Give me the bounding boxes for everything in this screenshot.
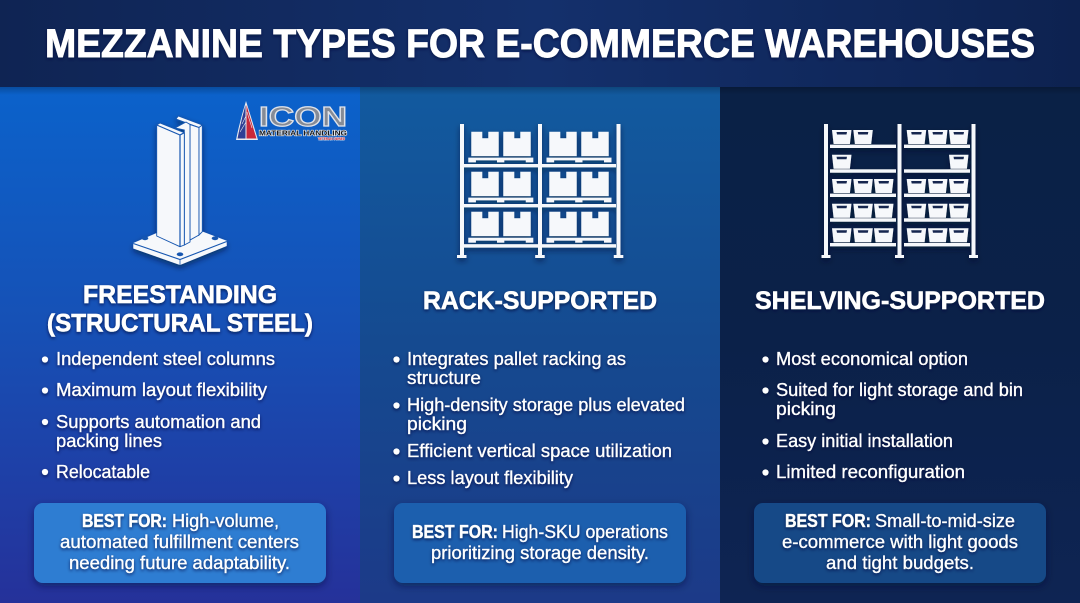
bullet list: freestanding: Maximum layout flexibility <box>56 379 268 400</box>
bullet list: rack-supported: picking <box>407 413 467 434</box>
logo: ICON Material Handling: VETERAN OWNED <box>318 136 345 141</box>
callout: best for rack-supported: High-SKU operations <box>502 521 668 542</box>
bullet list: shelving-supported: Easy initial installation <box>776 430 953 451</box>
callout: best for freestanding <box>34 503 326 583</box>
bullet list: shelving-supported: Suited for light storage and bin <box>776 379 1023 400</box>
heading: freestanding: (STRUCTURAL STEEL) <box>47 310 313 338</box>
bullet list: rack-supported: Efficient vertical space utilization <box>407 440 672 461</box>
bullet list: freestanding: Independent steel columns <box>56 348 275 369</box>
heading: shelving-supported: SHELVING-SUPPORTED <box>755 287 1045 315</box>
icon: steel column on base plate <box>133 116 227 265</box>
heading: freestanding <box>47 281 313 338</box>
bullet list: shelving-supported: picking <box>776 398 836 419</box>
callout: best for shelving-supported: e-commerce with light goods <box>782 531 1018 552</box>
callout: best for shelving-supported: Small-to-mid-size <box>875 510 1015 531</box>
callout: best for freestanding: automated fulfillment centers <box>60 531 299 552</box>
bullet list: freestanding <box>42 348 275 482</box>
panel: freestanding <box>0 87 360 603</box>
bullet list: rack-supported <box>393 348 685 488</box>
bullet list: rack-supported: structure <box>407 367 481 388</box>
bullet list: freestanding: Relocatable <box>56 461 150 482</box>
logo: ICON Material Handling <box>236 101 347 141</box>
callout: best for freestanding: High-volume, <box>172 510 279 531</box>
callout: best for rack-supported: prioritizing storage density. <box>431 542 649 563</box>
bullet list: shelving-supported: Most economical option <box>776 348 968 369</box>
icon: bin shelving <box>822 124 978 258</box>
bullet list: rack-supported: Integrates pallet racking as <box>407 348 626 369</box>
heading: rack-supported: RACK-SUPPORTED <box>423 287 657 315</box>
heading: freestanding: FREESTANDING <box>83 281 277 309</box>
callout: best for rack-supported <box>394 503 686 583</box>
title: MEZZANINE TYPES FOR E-COMMERCE WAREHOUSES <box>45 22 1035 66</box>
callout: best for rack-supported: BEST FOR: <box>412 522 498 542</box>
callout: best for shelving-supported <box>754 503 1046 583</box>
logo: ICON Material Handling: ICON <box>259 101 347 132</box>
bullet list: freestanding: Supports automation and <box>56 411 261 432</box>
callout: best for shelving-supported: and tight budgets. <box>826 552 974 573</box>
bullet list: shelving-supported <box>762 348 1023 482</box>
header band <box>0 0 1080 95</box>
callout: best for freestanding: needing future adaptability. <box>69 552 290 573</box>
bullet list: shelving-supported: Limited reconfiguration <box>776 461 965 482</box>
bullet list: rack-supported: Less layout flexibility <box>407 467 574 488</box>
callout: best for shelving-supported: BEST FOR: <box>785 511 871 531</box>
callout: best for freestanding: BEST FOR: <box>82 511 167 531</box>
panel: rack-supported <box>360 87 720 603</box>
bullet list: rack-supported: High-density storage plus elevated <box>407 394 685 415</box>
icon: pallet rack <box>457 124 623 258</box>
bullet list: freestanding: packing lines <box>56 430 162 451</box>
panel: shelving-supported <box>720 87 1080 603</box>
logo: ICON Material Handling: MATERIAL HANDLING <box>259 128 347 137</box>
